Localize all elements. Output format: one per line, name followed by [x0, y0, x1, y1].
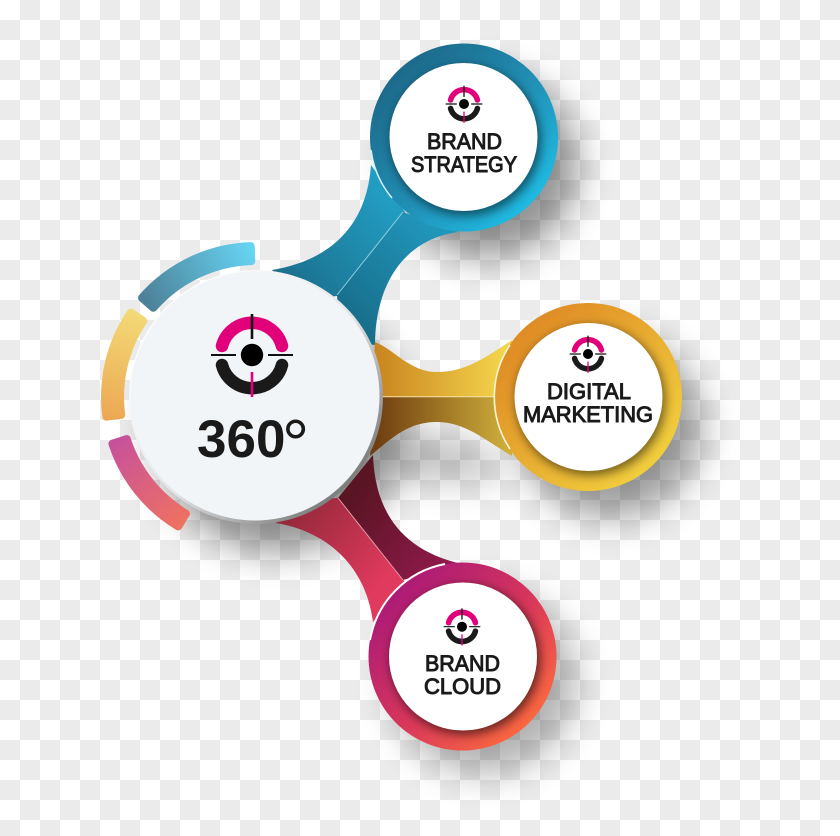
label: Brand Cloud [424, 651, 501, 699]
drop shadows [154, 74, 702, 774]
connector: main hub to Brand Cloud [276, 455, 462, 622]
heading: 360 degrees [197, 406, 309, 482]
label: Brand Strategy: BRAND [427, 129, 502, 154]
node: Brand Cloud [368, 562, 556, 750]
icon: target logo [570, 336, 606, 373]
label: Brand Cloud: BRAND [425, 651, 500, 676]
node: Digital Marketing [494, 303, 682, 491]
label: Brand Strategy [411, 129, 517, 177]
arc: yellow segment [105, 313, 143, 417]
heading: 360 degrees: 360 [197, 410, 285, 469]
connector: main hub to Brand Strategy [272, 165, 458, 345]
arc: pink segment [112, 439, 186, 526]
connector: main hub to Digital Marketing [370, 340, 512, 456]
heading: 360 degrees: ° [282, 406, 309, 482]
label: Brand Strategy: STRATEGY [411, 152, 517, 177]
icon: target logo large [211, 314, 293, 397]
label: Brand Cloud: CLOUD [424, 674, 501, 699]
label: Digital Marketing: MARKETING [523, 402, 653, 427]
label: Digital Marketing: DIGITAL [547, 379, 631, 404]
icon: target logo [446, 86, 482, 123]
node: Brand Strategy [370, 44, 558, 232]
label: Digital Marketing [523, 379, 653, 427]
arc: blue segment [142, 246, 251, 308]
icon: target logo [444, 608, 480, 645]
main hub circle [129, 270, 383, 524]
